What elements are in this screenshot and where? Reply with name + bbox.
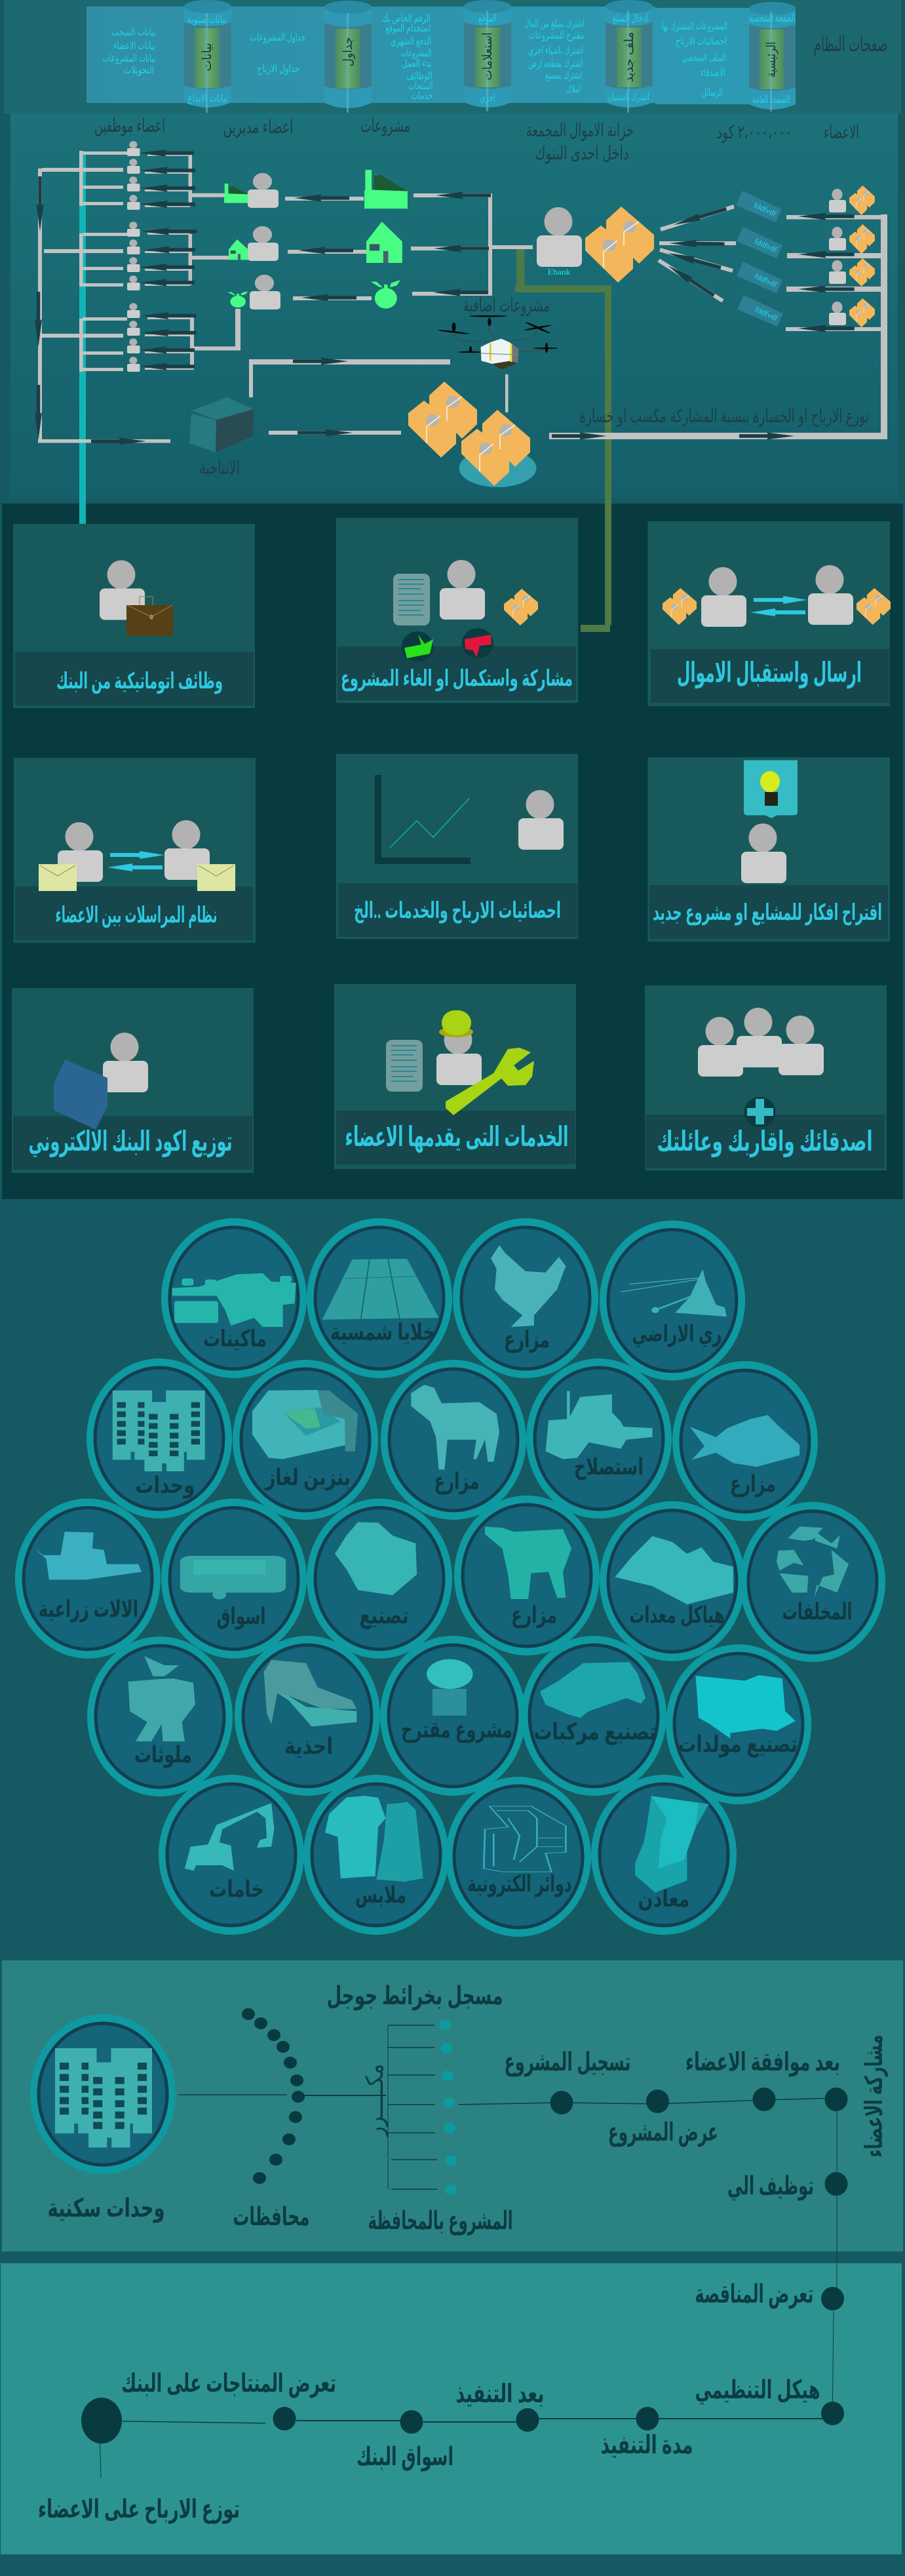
panel: system pages strip <box>87 0 796 113</box>
staff persons <box>127 141 140 372</box>
members <box>829 186 875 327</box>
icon: treasury pile <box>408 382 536 487</box>
label: bank markets: اسواق البنك <box>356 2443 453 2472</box>
dots: project locations <box>439 2020 457 2195</box>
icon: residential units <box>30 2014 176 2174</box>
icon: rooster <box>491 1245 566 1327</box>
labels: rows 4-5: تصنيع مركبات <box>533 1719 657 1745</box>
icon: tractor <box>546 1391 653 1459</box>
icon: boot <box>264 1660 356 1726</box>
panel: project categories <box>2 1199 903 1960</box>
card: member services <box>334 984 576 1169</box>
arrows: staff <box>139 149 197 370</box>
icon: blue card <box>54 1060 107 1130</box>
icon: equipment frame <box>615 1536 733 1604</box>
grey connector lines <box>38 151 887 443</box>
text block: home items: الرسائل <box>702 87 723 99</box>
card: distributing codes: توزيع اكود البنك الالكتروني <box>29 1126 232 1158</box>
labels: rows 4-5: دوائر الكترونية <box>468 1871 571 1897</box>
text block: data items: بيانات السحب <box>111 27 156 38</box>
card: statistics: احصائيات الارباح والخدمات ..الخ <box>354 898 561 924</box>
icons: rows 1-3 <box>35 1245 849 1604</box>
icon: excavator <box>185 1803 274 1871</box>
top band <box>4 0 901 113</box>
cylinder: home: الصفحة الشخصية <box>748 13 796 24</box>
icon: building <box>113 1391 205 1471</box>
text block: query items: المنتجات <box>409 81 433 92</box>
code cards <box>736 191 783 327</box>
text block: query items: استخدام الموقع <box>385 23 431 35</box>
cylinder: new file: ملف جديد <box>623 31 636 83</box>
cylinder: home: الصفحة العامة <box>752 94 790 106</box>
cylinder: queries: اخري <box>480 92 495 104</box>
icon: recycle <box>777 1526 849 1598</box>
label: register project: تسجيل المشروع <box>505 2048 630 2077</box>
olive connector <box>515 249 611 632</box>
text block: new file items: اشترك بمبلغ من المال <box>524 18 585 30</box>
panel: features section <box>2 498 903 1199</box>
arrows: managers <box>294 194 356 302</box>
labels: rows 4-5: معادن <box>638 1886 689 1912</box>
icon: gas pump <box>252 1390 358 1459</box>
label: registered on google maps: مسجل بخرائط جوجل <box>326 1982 503 2011</box>
icon: idea bubble <box>744 761 798 818</box>
text block: query items: خدمات <box>412 90 433 102</box>
card: automatic jobs: وظائف اتوماتيكية من البنك <box>56 669 223 694</box>
card: friends and family <box>645 985 887 1170</box>
label: present project: عرض المشروع <box>608 2118 718 2147</box>
labels: rows 1-3 <box>39 1320 852 1630</box>
text block: home items: الملف الشخصي <box>682 52 726 64</box>
cylinder: tables <box>324 1 372 113</box>
label: employing: توظيف الي <box>727 2172 814 2201</box>
connector lines <box>100 2249 837 2478</box>
labels: rows 1-3: مزارع <box>434 1469 480 1495</box>
icon: plus <box>744 1097 776 1127</box>
circles: rows 4-5 <box>87 1636 811 1937</box>
text block: query items <box>382 13 433 102</box>
icon: solar panel <box>322 1259 439 1320</box>
labels: rows 1-3: المخلفات <box>782 1599 852 1625</box>
card: statistics <box>336 754 578 939</box>
card: automatic jobs <box>13 524 255 708</box>
panel: money flow diagram <box>10 113 898 632</box>
icon: drone <box>438 315 558 370</box>
text block: new file items: اشترك بمصنع <box>545 70 582 82</box>
icon: sheep <box>411 1385 499 1469</box>
icon: generator <box>696 1675 796 1739</box>
text block: data items: بيانات المشروعات <box>102 53 156 65</box>
labels: rows 1-3: ماكينات <box>203 1326 267 1352</box>
labels: rows 1-3: الالات زراعية <box>39 1596 138 1623</box>
cyan connector <box>79 154 86 525</box>
text block: new file items: املاك <box>566 84 581 95</box>
arrows: members <box>798 212 855 332</box>
text block: query items: المشروعات <box>401 48 431 60</box>
cylinder: queries <box>464 0 511 111</box>
icon: briefcase <box>126 597 173 636</box>
text block: table items: جداول الارباح <box>257 64 300 75</box>
text block: new file items: اشترك باشياء اخري <box>528 45 583 57</box>
text block: data items: بيانات الاعضاء <box>113 41 155 52</box>
column headings: مشروعات <box>360 115 410 136</box>
text block: home items: احصائيات الارباح <box>676 36 727 48</box>
icons: rows 4-5 <box>128 1656 796 1893</box>
column headings: داخل احدى البنوك <box>535 143 629 164</box>
label: production: الانتاجية <box>199 458 240 478</box>
labels: rows 1-3: مزارع <box>730 1471 776 1497</box>
label: products shown: تعرض المنتاجات على البنك <box>121 2369 336 2398</box>
labels: rows 1-3: استصلاح <box>574 1454 644 1480</box>
code cards: fddfvdf <box>753 237 779 254</box>
icon: thumbs <box>402 628 493 662</box>
heading: additional projects: مشروعات اضافية <box>463 295 550 316</box>
icon: plant pot <box>128 1656 195 1741</box>
text block: home items: الاصدقاء <box>701 68 725 79</box>
labels: rows 4-5: ملوثات <box>134 1742 192 1768</box>
icon: proposed project <box>427 1659 473 1716</box>
panel: project workflow part 2 <box>1 2249 902 2554</box>
labels: rows 1-3: هياكل معدات <box>629 1602 725 1628</box>
text block: new file items: اشترك بقطعة ارض <box>528 58 583 70</box>
cylinder: data: بيانات الايداع <box>187 93 228 105</box>
text block: home items: المشروعات المشترك بها <box>662 21 727 33</box>
icon: engine <box>335 1522 417 1595</box>
labels: rows 1-3: خلايا شمسية <box>330 1320 435 1345</box>
text block: query items: الرقم الخاص بك <box>382 13 431 25</box>
circles: rows 1-3 <box>15 1218 885 1662</box>
label: project in governorate: المشروع بالمحافظة <box>368 2207 512 2236</box>
labels: rows 4-5: احذية <box>284 1734 333 1759</box>
card: distributing codes <box>12 988 254 1173</box>
cylinder: home: الرئيسية <box>765 42 779 77</box>
cylinder: home <box>748 2 796 111</box>
managers <box>224 173 280 309</box>
connector ends <box>79 498 86 525</box>
nodes: steps <box>81 2287 844 2444</box>
nodes: steps <box>550 2088 848 2196</box>
labels: rows 1-3: مزارع <box>511 1602 557 1629</box>
code cards: fddfvdf <box>754 305 779 323</box>
column headings: خزانة الاموال المجمعة <box>526 120 634 141</box>
cylinder: queries: الموقع <box>478 13 497 25</box>
diagonal grey lines <box>659 207 736 301</box>
label: members participation: مشاركة الاعضاء <box>860 2035 888 2157</box>
text block: data items: التحويلات <box>124 65 154 77</box>
labels: rows 1-3: بنزين لغاز <box>264 1465 351 1491</box>
icon: machines <box>172 1273 296 1327</box>
text block: query items: الوظائف <box>406 71 433 83</box>
column headings: ٢،٠٠٠،٠٠٠ كود <box>717 122 792 143</box>
arrows: codes to treasury <box>666 205 727 298</box>
text block: table items <box>250 32 305 75</box>
icon: wrench <box>446 1048 534 1115</box>
arrows: exchange <box>750 596 807 616</box>
labels: rows 1-3: وحدات <box>135 1473 195 1499</box>
dots: governorates <box>242 2008 305 2184</box>
icon: irrigation <box>621 1270 726 1317</box>
label: tender: تعرض المناقصة <box>695 2280 814 2309</box>
cylinder: data <box>184 0 231 113</box>
labels: rows 4-5: تصنيع مولدات <box>678 1732 798 1758</box>
label: execution period: مدة التنفيذ <box>600 2431 693 2459</box>
connector lines <box>179 2025 837 2402</box>
card: ideas <box>647 757 890 941</box>
code cards: fddfvdf <box>753 271 779 289</box>
icon: car <box>540 1662 645 1718</box>
icon: production box <box>189 397 254 452</box>
arrows: messages <box>107 851 164 871</box>
text block: home items <box>662 21 727 99</box>
card: member services: الخدمات التى يقدمها الاعضاء <box>345 1121 569 1153</box>
bank person and treasury <box>537 207 654 283</box>
text block: new file items <box>524 18 585 95</box>
labels: rows 4-5 <box>134 1717 798 1912</box>
text block: query items: بدء العمل <box>402 58 432 69</box>
text block: data items <box>102 27 156 77</box>
card: send and receive money <box>647 521 891 706</box>
labels: rows 4-5: خامات <box>209 1876 264 1902</box>
chart: profit line <box>375 775 471 864</box>
column headings <box>94 115 859 164</box>
card: messaging: نظام المراسلات بين الاعضاء <box>55 903 218 928</box>
projects <box>364 170 408 309</box>
labels: rows 1-3: مزارع <box>504 1327 550 1353</box>
cylinder: tables: جداول <box>341 37 355 67</box>
labels: rows 1-3: تصنيع <box>359 1603 409 1629</box>
cylinder: new file <box>606 0 653 113</box>
text block: new file items: مقترح للمشروعات <box>528 30 585 42</box>
label: after execution: بعد التنفيذ <box>456 2380 544 2408</box>
text block: query items: الدفع الشهري <box>391 36 431 48</box>
label: profit distribution: توزع الارباح على الاعضاء <box>38 2495 240 2524</box>
icon: circuit board <box>484 1806 566 1872</box>
cylinder: data: بيانات سنوية <box>187 14 227 26</box>
icon: fish <box>690 1415 799 1467</box>
labels: rows 1-3: اسواق <box>216 1604 266 1630</box>
cylinder: data: بيانات <box>201 43 214 71</box>
icon: farm machine <box>35 1532 142 1579</box>
label: residential units: وحدات سكنية <box>47 2194 165 2223</box>
text block: table items: جداول المشروعات <box>250 32 305 44</box>
cylinder: queries: استعلامات <box>481 33 495 80</box>
arrows: projects <box>433 191 491 296</box>
column headings: اعضاء موظفين <box>94 115 165 136</box>
card: messaging <box>14 758 256 943</box>
labels: rows 1-3: ري الاراضي <box>632 1321 722 1347</box>
icon: cow <box>485 1526 571 1599</box>
card: join or cancel project: مشاركة واستكمال او الغاء المشروع <box>341 666 573 692</box>
label: repeated: مكـــــرر <box>361 2064 389 2137</box>
icon: clothes <box>325 1796 423 1882</box>
label: organizational structure: هيكل التنظيمي <box>695 2376 820 2405</box>
labels: rows 4-5: مشروع مقترح <box>401 1717 512 1743</box>
icon: mining <box>635 1796 709 1893</box>
icon: helmet <box>439 1010 473 1037</box>
labels: rows 4-5: ملابس <box>355 1882 406 1908</box>
column headings: الاعضاء <box>824 122 859 142</box>
icon: market trailer <box>180 1556 286 1599</box>
cylinder: new file: اشترك باستبيان <box>607 92 649 104</box>
panel: project workflow part 1 <box>2 1960 903 2402</box>
bank person and treasury: Ebank <box>548 267 571 277</box>
code cards: fddfvdf <box>752 201 778 218</box>
column headings: اعضاء مديرين <box>223 117 294 138</box>
cylinder: new file: ادخال المبلغ <box>612 13 649 25</box>
card: join or cancel project <box>336 518 578 703</box>
arrows: left rail and return <box>35 176 794 445</box>
label: governorates: محافظات <box>233 2203 309 2231</box>
